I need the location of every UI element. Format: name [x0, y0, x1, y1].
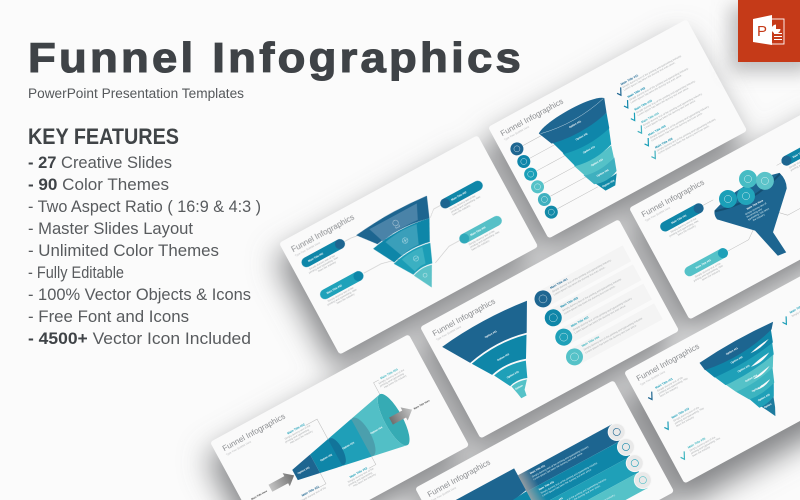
key features heading: KEY FEATURES	[28, 124, 179, 149]
ribbon 6: Option #05	[757, 392, 771, 402]
key features list: - 4500+ Vector Icon Included	[28, 330, 251, 348]
item 5: Main Title #05	[647, 124, 667, 137]
pill: main title 04: Main Title #04	[470, 225, 487, 237]
ribbon 5: Option #05	[751, 383, 765, 393]
band 1: Option #01	[568, 119, 582, 129]
funnel body: Simply dummy text of	[745, 202, 767, 216]
row 3	[552, 284, 652, 349]
slide title: Type Your Subtitle Here	[639, 369, 666, 387]
row 1: Simply dummy text of the printing and typesetting industry.	[551, 258, 612, 293]
funnel band 1	[355, 194, 437, 253]
row 2: Main Title #02	[560, 296, 579, 309]
label main title 03: Main Title #03	[349, 466, 368, 479]
pill: main title 04: been the industry	[471, 238, 491, 252]
band 5: Option #05	[596, 168, 610, 178]
label main title 02: Simply dummy text of the	[284, 423, 312, 441]
label main title 03: printing and typesetting	[347, 470, 373, 487]
sideways funnel	[280, 390, 415, 499]
pill: main title 03: Simply dummy text of the	[694, 261, 722, 279]
slide title: Type Your Subtitle Here	[435, 324, 462, 342]
pill: main title 01: Main Title #01	[307, 251, 325, 263]
label main title 01	[297, 482, 327, 500]
ribbon 3: Option #03	[737, 363, 751, 373]
slide title: Funnel Infographics	[499, 97, 565, 138]
item 3: Simply dummy text of the	[672, 405, 700, 423]
funnel body: Main Title Here	[746, 198, 764, 211]
item 2	[779, 297, 800, 325]
pill: main title 03	[318, 269, 370, 310]
row 4: Simply dummy text of the printing and typesetting industry.	[583, 316, 644, 351]
item 1	[645, 370, 690, 403]
item 5	[641, 101, 712, 147]
pill: main title 04	[458, 214, 509, 255]
row 2: Main Title #02	[538, 480, 555, 491]
label main title 04: Main Title #04	[379, 367, 399, 380]
item 3: printing and typesetting. Has	[674, 406, 705, 425]
funnel	[441, 298, 567, 420]
funnel band 3	[392, 241, 440, 280]
label main title 02: Has been the industry	[289, 429, 314, 445]
band 3: Option #03	[582, 144, 596, 155]
row 2	[527, 440, 631, 500]
item 5: Main Title #05	[687, 436, 706, 449]
row 1: Lorem Ipsum has been the dummy text ever since.	[553, 265, 606, 296]
funnel icons	[392, 219, 428, 279]
band 3: Option #03	[506, 369, 520, 380]
item 1: Lorem Ipsum has been the dummy text ever since.	[623, 60, 676, 92]
row 1: Main Title #01	[529, 463, 546, 475]
key features list	[28, 154, 261, 348]
funnel body: the printing and	[746, 208, 763, 219]
label main title 02: printing and typesetting	[284, 427, 310, 444]
funnel	[450, 468, 543, 500]
funnel body: typesetting, has been	[747, 207, 770, 221]
pill: main title 01: been the industry	[677, 223, 697, 237]
pill: main title 01: Simply dummy text of the	[308, 253, 336, 271]
item 2: Main Title #02	[627, 86, 646, 99]
ribbon 1: Option #01	[725, 346, 739, 356]
slide: spiral funnel (right lower)	[624, 264, 800, 484]
row 1	[518, 424, 621, 492]
wide end cap	[372, 390, 415, 449]
band 1: Option #01	[297, 465, 311, 475]
band 3	[325, 419, 372, 471]
funnel band 4	[413, 264, 441, 292]
row 1: Lorem Ipsum has been the dummy text ever since.	[533, 452, 584, 481]
band labels: Option #04	[369, 425, 384, 435]
item 3: been the industry	[675, 415, 695, 428]
item 5: Simply dummy text of the	[689, 435, 717, 453]
label main title 02: Main Title #02	[286, 422, 306, 435]
pill: main title 01	[658, 202, 710, 242]
pill: main title 02: Simply dummy text of the	[449, 194, 477, 211]
pill: main title 04: printing and typesetting. Has	[469, 230, 501, 249]
band 1: Option #01	[484, 329, 498, 339]
pill: main title 01: Main Title #01	[670, 213, 688, 225]
funnel	[355, 194, 466, 307]
row 3: Simply dummy text of the printing and typesetting industry.	[572, 296, 633, 332]
pill: main title 02: printing and typesetting. Has	[450, 194, 482, 214]
slide title: Funnel Infographics	[431, 297, 497, 338]
row 4: Main Title #04	[581, 335, 600, 348]
pill: main title 04: Simply dummy text of the	[468, 229, 496, 246]
row 1: Main Title #01	[549, 277, 569, 290]
arrow right: Main Title Here	[413, 399, 431, 410]
item 1: Simply dummy text of the printing and typesetting industry.	[621, 54, 682, 89]
item 1: printing and typesetting. Has	[658, 376, 689, 395]
pill: main title 02: been the industry	[452, 203, 472, 217]
item 3: Lorem Ipsum has been the dummy text ever since.	[637, 86, 690, 117]
pill: main title 03: been the industry	[336, 292, 356, 305]
pill: main title 01: Simply dummy text of the	[670, 216, 698, 234]
pill: main title 03: Simply dummy text of the	[327, 285, 355, 303]
item 1: been the industry	[659, 385, 679, 398]
arrow right	[387, 393, 434, 428]
key features list: - Free Font and Icons	[28, 308, 189, 326]
label main title 03: Has been the industry	[352, 472, 377, 488]
band 6: Option #06	[601, 178, 616, 188]
slide shadows	[206, 35, 800, 500]
ribbon gaps	[738, 339, 788, 390]
connector lines	[344, 193, 464, 296]
pill: main title 01: been the industry	[317, 260, 337, 273]
slide title: Funnel Infographics	[635, 342, 701, 383]
pill: main title 02	[438, 179, 490, 219]
slide title: Type Your Subtitle Here	[644, 205, 671, 223]
row 4: Lorem Ipsum has been the dummy text ever since.	[584, 323, 638, 354]
main title: Funnel Infographics	[28, 34, 524, 81]
item 3: Main Title #03	[634, 99, 653, 112]
funnel body	[709, 168, 800, 274]
slide: funnel with wide rows (bottom)	[415, 380, 674, 500]
pill: main title 03: Main Title #03	[326, 283, 343, 295]
row circles	[605, 420, 655, 492]
ribbon 4: Option #04	[744, 373, 758, 383]
item 4: Main Title #04	[640, 111, 660, 124]
row 4	[544, 472, 648, 500]
label main title 04: printing and typesetting	[379, 371, 405, 388]
key features list: - Fully Editable	[28, 264, 124, 282]
item 5: Lorem Ipsum has been the dummy text ever since.	[650, 111, 704, 142]
row 4	[563, 303, 663, 369]
band labels: Option #02	[319, 452, 333, 462]
item 1: Main Title #01	[620, 73, 639, 86]
item 2: Simply dummy text of the printing and typesetting industry.	[628, 66, 689, 102]
powerpoint badge shadow	[730, 6, 800, 72]
band 4: Option	[514, 383, 524, 391]
slide title: Funnel Infographics	[640, 178, 706, 219]
row 2: Lorem Ipsum has been the dummy text ever since.	[563, 284, 616, 315]
row 3: Main Title #03	[570, 315, 589, 328]
item 1: Simply dummy text of the	[656, 375, 684, 393]
row 1: Simply dummy text of the printing and typesetting industry.	[531, 445, 590, 479]
icon: powerpoint logo: P	[757, 23, 767, 40]
pill: main title 03: printing and typesetting. Has	[693, 263, 724, 283]
slide title: Funnel Infographics	[426, 458, 492, 499]
check list	[613, 51, 719, 160]
row 1	[531, 245, 631, 311]
item 2: Lorem Ipsum has been the dummy text ever since.	[630, 73, 683, 104]
subtitle: PowerPoint Presentation Templates	[28, 86, 244, 101]
item 5	[677, 430, 723, 463]
band 4	[347, 394, 407, 463]
item 4: Lorem Ipsum has been the dummy text ever since.	[643, 98, 697, 130]
funnel band 2	[371, 215, 440, 268]
key features list: - Unlimited Color Themes	[28, 242, 219, 260]
connector lines	[284, 380, 414, 496]
row 2: Lorem Ipsum has been the dummy text ever since.	[542, 468, 593, 498]
item 4: Simply dummy text of the printing and typesetting industry.	[642, 91, 703, 127]
label main title 04	[376, 365, 408, 391]
band 4: Option #04	[590, 157, 604, 167]
label main title 02	[281, 420, 315, 447]
pill: main title 03: been the industry	[701, 268, 721, 282]
pill: main title 01	[300, 237, 352, 278]
band 2: Option #02	[575, 131, 589, 141]
slide: sideways funnel with arrows (bottom left)	[210, 334, 469, 500]
pill: main title 03: Main Title #03	[695, 258, 712, 270]
item 5: Simply dummy text of the printing and typesetting industry.	[649, 104, 710, 140]
pill: main title 01: printing and typesetting. Has	[668, 218, 700, 238]
slide title: Type Your Subtitle Here	[503, 124, 530, 142]
item 6: Simply dummy text of the printing and typesetting industry.	[656, 117, 717, 152]
funnel body: the industry	[752, 213, 766, 222]
item 5: printing and typesetting. Has	[690, 436, 721, 455]
row fade	[518, 469, 565, 500]
item 3	[627, 76, 698, 122]
label main title 03	[344, 463, 378, 490]
funnel cone: Option	[763, 402, 773, 409]
band 2: Option #02	[496, 352, 510, 362]
circle icons	[508, 140, 560, 221]
row 2	[541, 264, 641, 330]
slide: funnel with pills (centre left)	[279, 135, 538, 355]
row 3: Lorem Ipsum has been the dummy text ever since.	[574, 303, 627, 335]
row 2: Simply dummy text of the printing and typesetting industry.	[561, 277, 622, 312]
pill: main title 03	[683, 246, 735, 287]
item 6: Main Title #06	[654, 136, 674, 150]
slide title: Funnel Infographics	[290, 213, 356, 254]
band 2	[308, 439, 342, 477]
funnel	[536, 92, 643, 206]
label main title 04: Has been the industry	[383, 373, 408, 389]
pill: main title 01: printing and typesetting. Has	[308, 255, 339, 275]
key features list: - Master Slides Layout	[28, 220, 193, 238]
arrow left	[247, 469, 298, 500]
slide title: Type Your Subtitle Here	[225, 439, 252, 457]
row 3	[536, 456, 639, 500]
item 3: Main Title #03	[671, 407, 690, 420]
slide: four band funnel with rows (centre)	[420, 219, 679, 439]
item 6: Lorem Ipsum has been the dummy text ever since.	[657, 124, 711, 155]
slide: six band funnel with checks (top)	[488, 19, 747, 239]
pill: main title 02: Main Title #02	[450, 190, 468, 202]
key features list: - 90 Color Themes	[28, 176, 169, 194]
spiral funnel	[698, 321, 800, 436]
label main title 01: Main Title #01	[301, 484, 320, 497]
item 4	[634, 89, 705, 134]
row 2: Simply dummy text of the printing and typesetting industry.	[540, 461, 599, 495]
item 1	[613, 51, 684, 96]
ribbon 2: Option #02	[730, 355, 744, 365]
balls	[712, 160, 779, 216]
key features list: - 100% Vector Objects & Icons	[28, 286, 251, 304]
item 6	[648, 114, 719, 160]
item 5: been the industry	[691, 444, 711, 458]
slide title: Funnel Infographics	[221, 412, 287, 453]
powerpoint badge	[738, 0, 800, 62]
band labels: Option #03	[341, 440, 355, 450]
pill: main title 02	[780, 135, 800, 174]
item 1: Main Title #01	[654, 377, 674, 390]
key features list: - Two Aspect Ratio ( 16:9 & 4:3 )	[28, 198, 261, 216]
item 3	[661, 400, 707, 433]
pill: main title 03: printing and typesetting. Has	[326, 287, 358, 307]
slide title: Type Your Subtitle Here	[294, 240, 321, 258]
slide: kitchen funnel with balls (right upper)	[629, 100, 800, 320]
label main title 03: Simply dummy text of the	[347, 466, 375, 484]
connector lines	[703, 162, 800, 251]
item 3: Simply dummy text of the printing and typesetting industry.	[635, 79, 696, 114]
label main title 04: Simply dummy text of the	[378, 368, 406, 385]
arrows from circles to funnel	[523, 124, 598, 209]
key features list: - 27 Creative Slides	[28, 154, 172, 172]
item 2	[620, 63, 691, 109]
band labels	[319, 425, 384, 462]
